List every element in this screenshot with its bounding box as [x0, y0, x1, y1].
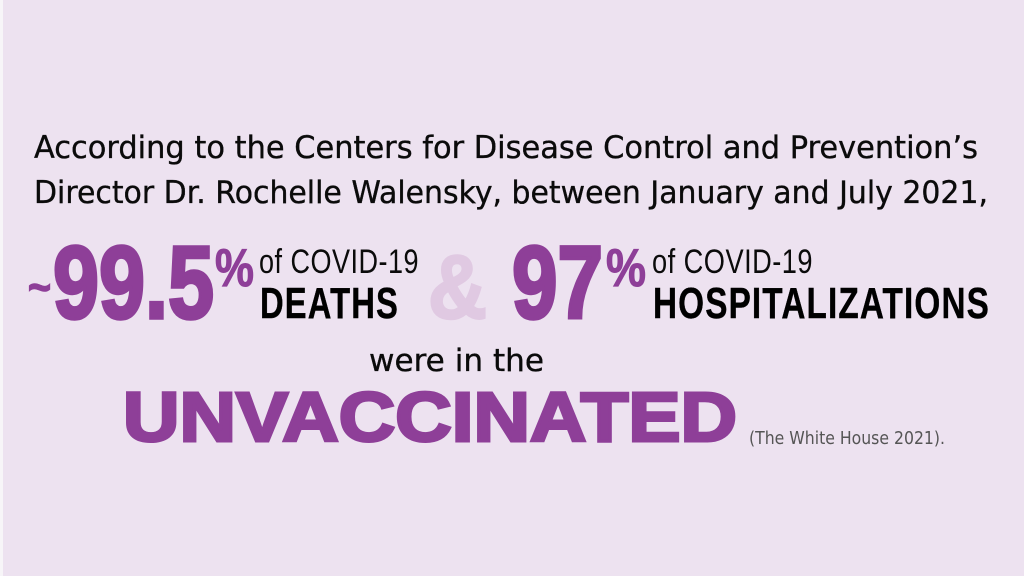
statistic: 97% of COVID-19 hospitalizations: [512, 225, 990, 340]
label of COVID-19: of COVID-19: [259, 243, 419, 281]
label of COVID-19: of COVID-19: [652, 243, 813, 281]
intro text: According to the Centers for Disease Control and Prevention’s: [34, 130, 978, 166]
value 99.5: 99.5: [53, 225, 214, 340]
value 97: 97: [512, 225, 603, 340]
citation: (The White House 2021).: [749, 428, 945, 449]
percent sign: %: [606, 239, 646, 298]
tilde: ~: [28, 263, 51, 312]
ampersand: &: [428, 238, 487, 338]
intro text: [34, 130, 988, 211]
percent sign: %: [215, 239, 254, 298]
text: were in the: were in the: [369, 343, 544, 379]
intro text: Director Dr. Rochelle Walensky, between January and July 2021,: [34, 175, 988, 211]
headline UNVACCINATED: UNVACCINATED: [123, 378, 737, 456]
label DEATHS: DEATHS: [260, 279, 399, 328]
statistic: 99.5% of COVID-19 deaths: [28, 225, 419, 340]
